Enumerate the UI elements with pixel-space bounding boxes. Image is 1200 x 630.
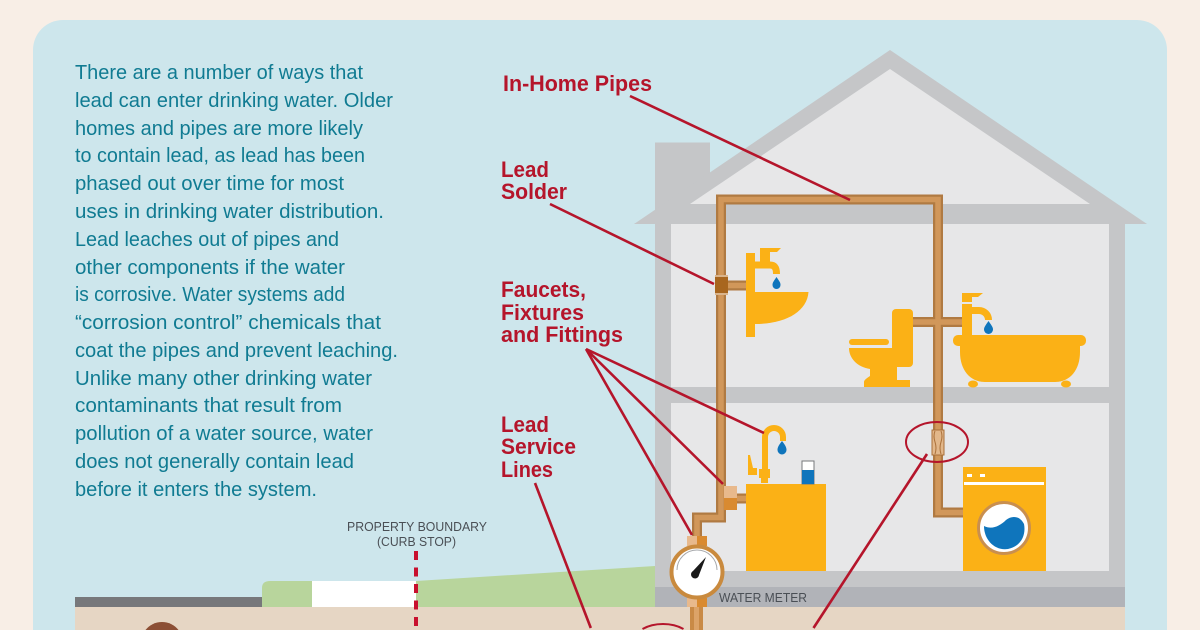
icon: washing machine [963, 467, 1046, 571]
text block: introduction: Unlike many other drinking water [75, 368, 372, 390]
text block: introduction: Lead leaches out of pipes and [75, 229, 339, 251]
icon: toilet [849, 309, 913, 387]
text block: introduction: There are a number of ways that [75, 62, 363, 84]
callout: faucets, fixtures and fittings [501, 277, 764, 535]
callout: lead solder: Lead [501, 157, 549, 182]
icon: water drop [772, 277, 780, 289]
callout: service line circle [642, 624, 684, 629]
text block: introduction: “corrosion control” chemicals that [75, 312, 381, 334]
house [634, 50, 1147, 607]
icon: glass of water [802, 461, 814, 484]
text block: introduction: phased out over time for most [75, 173, 344, 195]
icon: kitchen cabinet and faucet [746, 428, 826, 571]
callout: in-home pipes [503, 71, 850, 200]
text block: introduction: coat the pipes and prevent leaching. [75, 340, 398, 362]
text block: introduction: is corrosive. Water systems add [75, 284, 345, 306]
icon: bathroom sink [746, 248, 808, 337]
icon: lead solder joint [715, 275, 728, 295]
text block: introduction [75, 62, 398, 501]
text block: introduction: other components if the water [75, 257, 345, 279]
ground: road, lawn and curb [75, 566, 1125, 630]
callout: faucets, fixtures and fittings: Fixtures [501, 300, 584, 325]
callout: lead solder: Solder [501, 179, 567, 204]
text block: introduction: contaminants that result from [75, 395, 342, 417]
icon: corroded pipe coupling [932, 430, 944, 455]
text block: introduction: does not generally contain lead [75, 451, 354, 473]
label: property boundary [347, 519, 487, 549]
callout: faucets, fixtures and fittings: and Fittings [501, 322, 623, 347]
icon: water drop [778, 441, 786, 454]
callout: lead service lines: Service [501, 434, 576, 459]
callout: lead solder [501, 157, 714, 284]
copper pipes [690, 200, 963, 630]
callout: lead service lines [501, 412, 591, 628]
text block: introduction: pollution of a water source, water [75, 423, 373, 445]
text block: introduction: to contain lead, as lead has been [75, 145, 365, 167]
callout: in-home pipes: In-Home Pipes [503, 71, 652, 96]
callout: lead service lines: Lines [501, 457, 553, 482]
label: water meter: WATER METER [719, 590, 807, 605]
icon: bathtub with faucet [953, 293, 1086, 388]
callout: coupling circle and leader [814, 422, 968, 628]
icon: water meter [672, 536, 722, 607]
callout: lead service lines: Lead [501, 412, 549, 437]
text block: introduction: before it enters the system. [75, 479, 317, 501]
text block: introduction: lead can enter drinking water. Older [75, 90, 393, 112]
label: property boundary: PROPERTY BOUNDARY [347, 519, 487, 534]
icon: water drop [984, 321, 993, 334]
text block: introduction: homes and pipes are more likely [75, 118, 363, 140]
boundary dashed line [414, 551, 418, 629]
label: property boundary: (CURB STOP) [377, 534, 456, 549]
callout: faucets, fixtures and fittings: Faucets, [501, 277, 586, 302]
text block: introduction: uses in drinking water distribution. [75, 201, 384, 223]
icon: fitting at kitchen sink [724, 486, 737, 510]
icon: head at bottom edge [146, 622, 178, 630]
